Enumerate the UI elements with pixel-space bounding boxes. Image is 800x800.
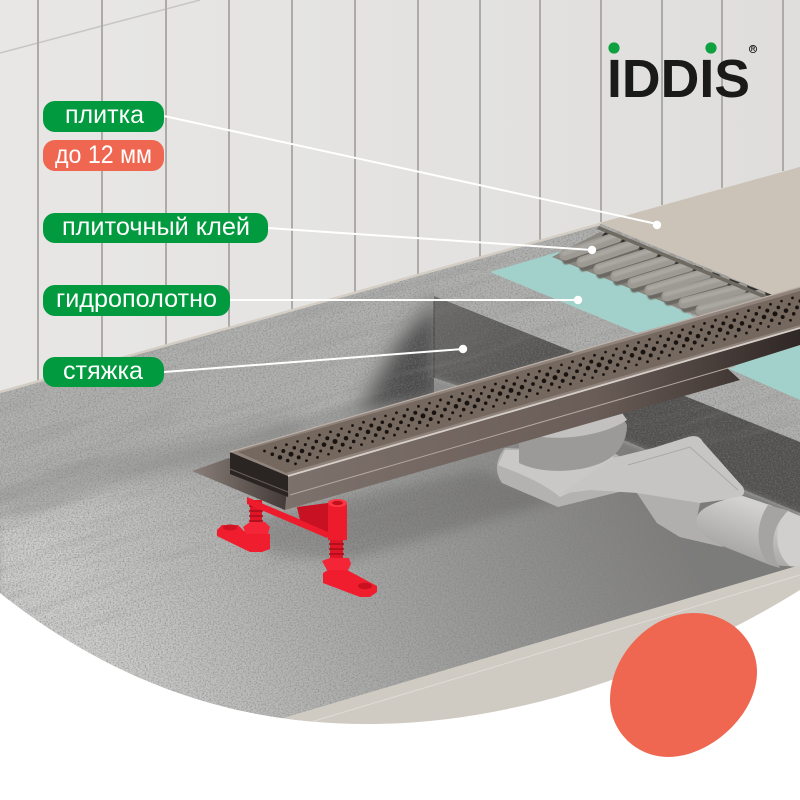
- floor edge shading: [0, 428, 300, 512]
- tile adhesive ribs: [552, 231, 775, 320]
- leader line: tile: [164, 116, 661, 229]
- label: up to 12 mm: до 12 мм: [55, 141, 152, 169]
- beige tile: [597, 167, 800, 302]
- leader line: membrane: [230, 296, 582, 304]
- linear drain: [192, 287, 800, 510]
- leader line: screed: [164, 345, 467, 372]
- logo: IDDIS: [607, 49, 750, 109]
- logo: R: [751, 47, 756, 53]
- label: tile: [43, 101, 164, 132]
- drain perforation: [263, 287, 800, 465]
- cross bar: [247, 497, 332, 538]
- waterproofing membrane front: [727, 345, 800, 400]
- drain flange: [192, 458, 289, 510]
- waterproofing membrane back: [490, 252, 695, 333]
- right screw: [330, 540, 343, 558]
- siphon base plate: [497, 448, 620, 507]
- tiled wall: [0, 0, 800, 392]
- siphon drum: [519, 422, 627, 471]
- screed concrete: [0, 167, 800, 728]
- left foot: [217, 525, 270, 552]
- drain grate panel: [238, 291, 800, 473]
- mid bracket: [297, 503, 328, 532]
- coral circle accent: [610, 613, 757, 757]
- floor shadow under drain: [250, 470, 560, 560]
- drain front face: [285, 328, 800, 510]
- wall base edge: [0, 224, 600, 392]
- recess right wall: [434, 296, 800, 513]
- right post: [328, 503, 347, 540]
- left screw: [250, 500, 262, 522]
- siphon wedge body: [560, 436, 744, 547]
- label: waterproofing: гидрополотно: [56, 285, 217, 313]
- label: tile adhesive: плиточный клей: [62, 213, 250, 241]
- red height-adjustable support: [217, 497, 377, 597]
- drain grate top rim: [230, 287, 800, 476]
- leader line: adhesive: [268, 228, 596, 254]
- drain siphon: [497, 410, 800, 568]
- recess floor: [0, 378, 800, 728]
- drain pipe: [697, 496, 800, 567]
- beige floor tile strip: [284, 566, 800, 724]
- concrete grain texture: [0, 128, 800, 730]
- label: screed: стяжка: [63, 357, 143, 385]
- drain end face: [230, 452, 288, 497]
- label: tile: плитка: [65, 101, 144, 129]
- right foot: [323, 570, 377, 597]
- label: screed: [43, 357, 164, 387]
- recess corner shadow: [360, 296, 440, 410]
- screed top and front wall: [0, 167, 800, 718]
